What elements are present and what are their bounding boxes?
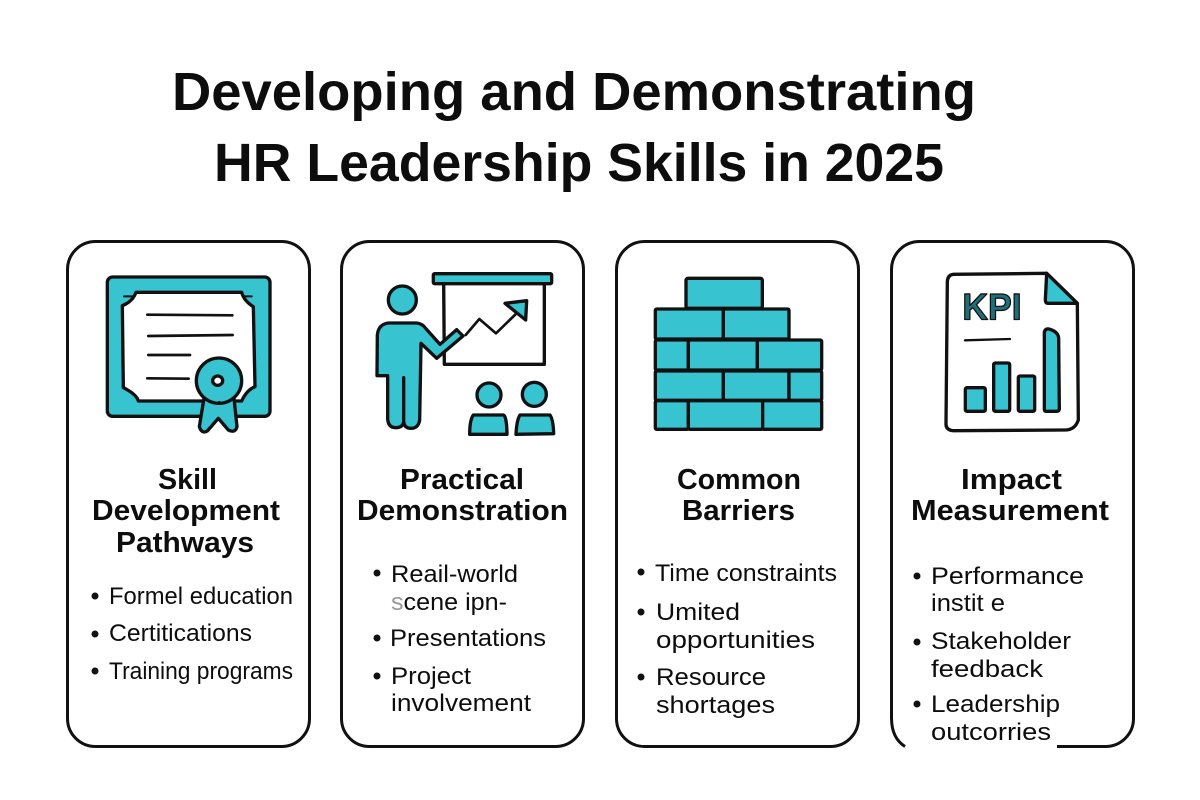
panel: impact measurement: [892, 242, 1134, 746]
icon: presenter with chart: [377, 274, 554, 434]
panel: practical demonstration: [342, 242, 584, 746]
heading: impact measurement: [911, 464, 1109, 527]
bullet list: common barriers: Umited: [656, 599, 740, 626]
bullet list: common barriers: shortages: [656, 692, 775, 719]
heading: common barriers: [677, 464, 801, 527]
bullet list: common barriers: opportunities: [656, 627, 815, 654]
icon: brick wall: [655, 278, 822, 429]
bullet list: practical demonstration: Reail-world: [391, 561, 518, 588]
bullet list: practical demonstration: scene ipn-: [391, 589, 507, 616]
panel: skill development pathways: [68, 242, 310, 746]
heading: skill development pathways: [92, 464, 280, 559]
bullet list: common barriers: Resource: [656, 664, 766, 691]
bullet list: impact measurement: outcorries: [931, 719, 1051, 746]
icon: KPI document: KPI: [962, 285, 1022, 327]
bullet list: practical demonstration: [374, 561, 546, 717]
bullet list: impact measurement: feedback: [931, 656, 1044, 683]
panel: common barriers: [616, 242, 858, 746]
bullet list: skill development: Certitications: [109, 620, 252, 647]
bullet list: impact measurement: Leadership: [931, 691, 1060, 718]
icon: certificate: [107, 277, 270, 432]
bullet list: impact measurement: Stakeholder: [931, 628, 1071, 655]
title: Developing and Demonstrating: [172, 62, 976, 122]
bullet list: common barriers: [638, 560, 837, 719]
heading: skill development pathways: Development: [92, 495, 280, 527]
heading: skill development pathways: Skill: [158, 464, 217, 496]
bullet list: impact measurement: Performance: [931, 563, 1084, 590]
bullet list: practical demonstration: Project: [391, 663, 471, 690]
title: [172, 62, 976, 193]
bullet list: skill development: Formel education: [109, 583, 293, 610]
bullet list: impact measurement: instit e: [931, 590, 1005, 617]
bullet list: skill development: [92, 583, 293, 685]
heading: impact measurement: Impact: [961, 464, 1062, 496]
heading: practical demonstration: Demonstration: [357, 495, 568, 527]
bullet list: practical demonstration: involvement: [391, 690, 531, 717]
heading: skill development pathways: Pathways: [116, 527, 254, 559]
bullet list: practical demonstration: Presentations: [390, 625, 546, 652]
heading: common barriers: Barriers: [682, 495, 795, 527]
bullet list: common barriers: Time constraints: [655, 560, 837, 587]
icon: KPI document: [946, 273, 1078, 431]
title: HR Leadership Skills in 2025: [214, 133, 944, 193]
heading: practical demonstration: [357, 464, 568, 527]
bullet list: impact measurement: [914, 563, 1084, 746]
heading: impact measurement: Measurement: [911, 495, 1109, 527]
heading: common barriers: Common: [677, 464, 801, 496]
heading: practical demonstration: Practical: [400, 464, 524, 496]
bullet list: skill development: Training programs: [109, 658, 293, 685]
